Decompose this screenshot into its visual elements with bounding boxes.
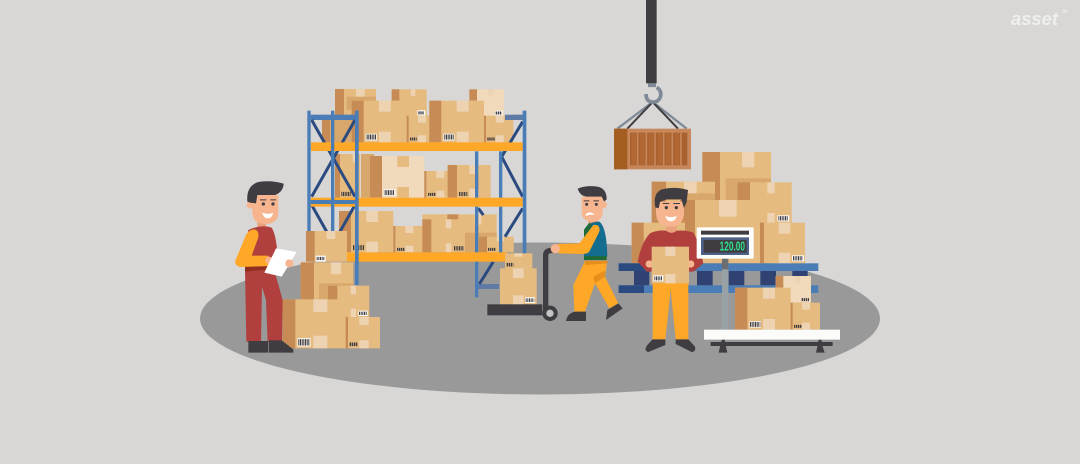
- scale readout: 120.00: [720, 240, 745, 254]
- shelf rack: [307, 111, 526, 297]
- stacked boxes beside worker: [283, 231, 380, 348]
- worker with clipboard: [235, 181, 297, 353]
- lower row boxes: [339, 211, 514, 252]
- pallet table: [619, 263, 818, 293]
- weighing scale: [697, 227, 840, 353]
- boxes on scale: [735, 276, 820, 330]
- worker pushing trolley: [551, 186, 623, 321]
- hanging container: [614, 129, 691, 169]
- top row boxes: [322, 89, 513, 142]
- middle row boxes: [335, 154, 491, 198]
- right scene: crane, trolley, table, workers, scale: [487, 0, 840, 353]
- trolley with boxes: [487, 250, 558, 321]
- left scene: shelf, boxes, worker: [235, 89, 526, 353]
- logo: asset: ∞: [1061, 7, 1068, 17]
- crane arm and hook: [617, 0, 687, 129]
- floor ellipse: [200, 242, 880, 394]
- rear box pile: [632, 152, 805, 263]
- worker holding box: [638, 188, 703, 352]
- logo: asset: asset: [1011, 9, 1059, 29]
